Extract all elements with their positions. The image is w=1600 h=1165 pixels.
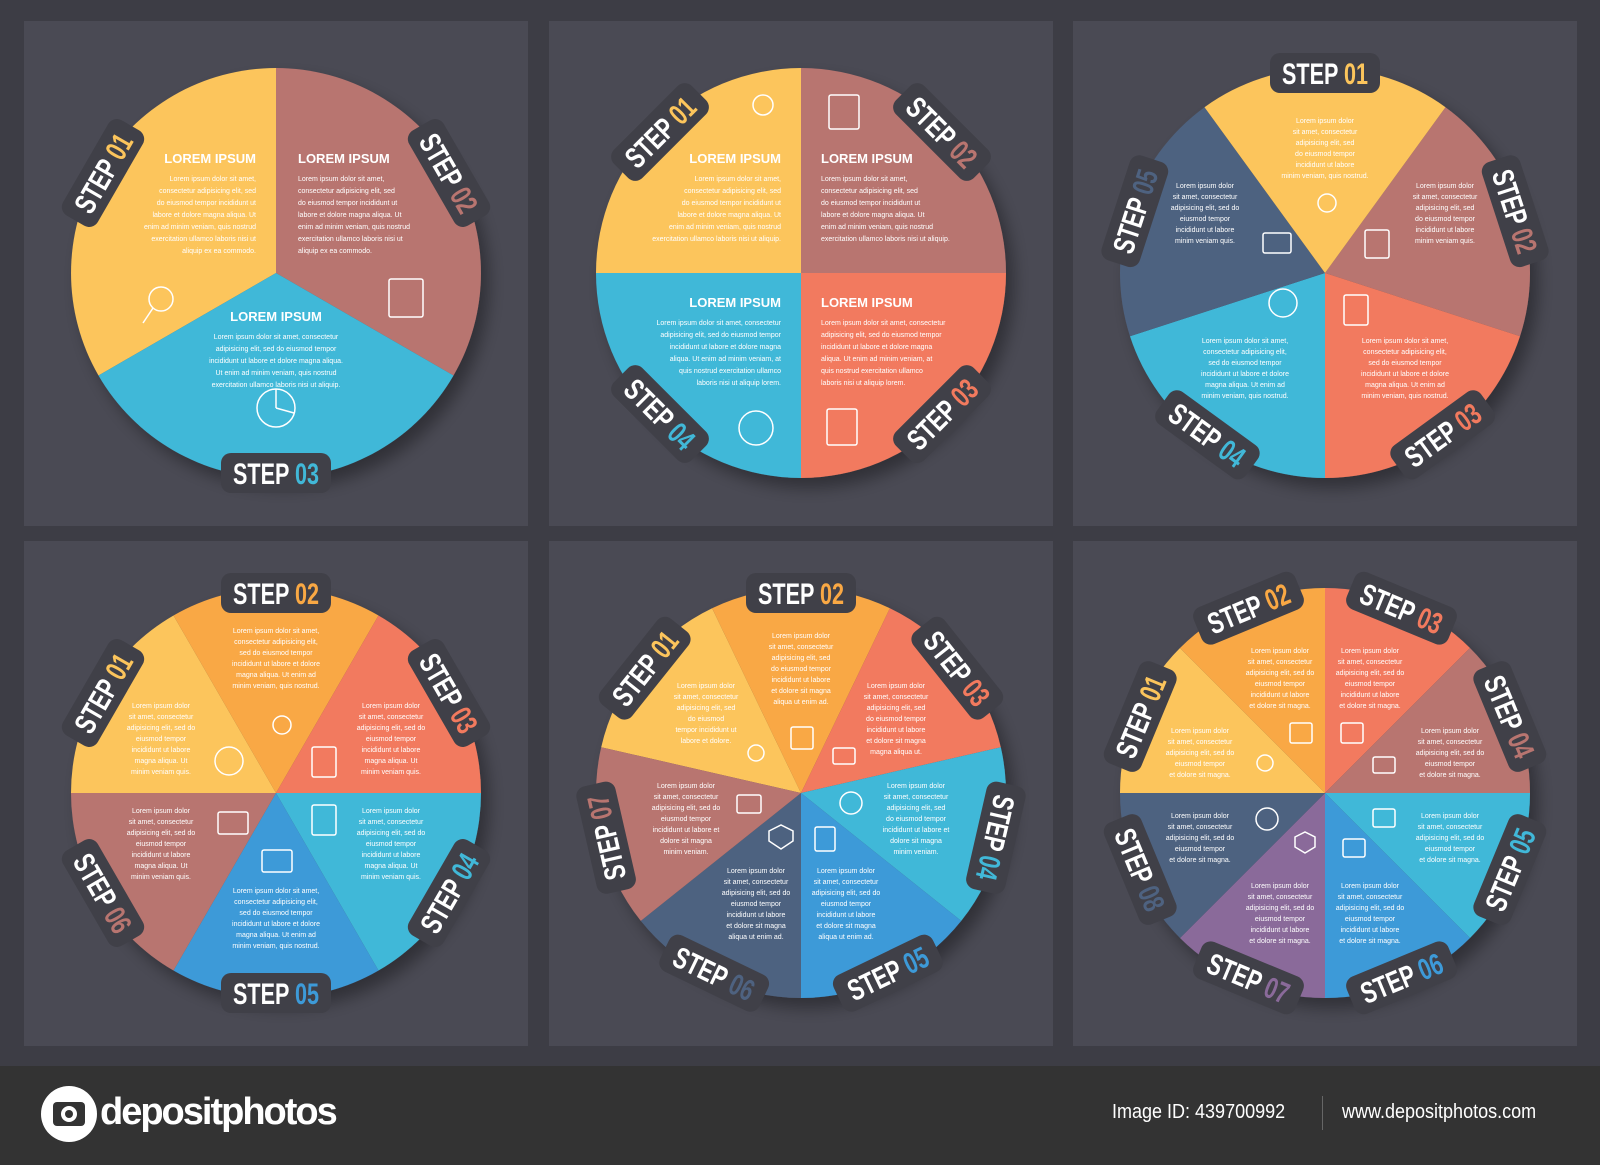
texts: sit amet, consectetur [1338, 659, 1403, 666]
step labels: STEP 04 [1477, 671, 1540, 763]
texts: incididunt ut labore [1251, 692, 1309, 699]
texts: consectetur adipisicing elit, sed [684, 188, 781, 195]
texts: eiusmod tempor [1345, 916, 1396, 923]
texts: Lorem ipsum dolor sit amet, consectetur [656, 320, 782, 327]
texts: sit amet, consectetur [724, 879, 789, 886]
texts: sit amet, consectetur [359, 714, 424, 721]
step labels: STEP 01 [1110, 671, 1173, 763]
text: wedge 1: consectetur adipisicing elit, sed [159, 188, 256, 195]
texts: minim veniam quis. [1175, 238, 1235, 245]
texts: minim veniam, quis nostrud. [232, 943, 320, 950]
texts: incididunt ut labore et dolore [1361, 371, 1449, 378]
texts: consectetur adipisicing elit, [234, 639, 318, 646]
texts: Lorem ipsum dolor [362, 703, 421, 710]
texts: adipisicing elit, sed do eiusmod tempor [821, 332, 942, 339]
step labels [58, 115, 494, 493]
texts: incididunt ut labore [362, 747, 420, 754]
pie: 6 wedges [71, 588, 481, 998]
pie: 5 wedges [1120, 68, 1530, 478]
step labels: STEP 06 [668, 941, 759, 1008]
texts: Lorem ipsum dolor [1421, 813, 1480, 820]
texts: sit amet, consectetur [674, 694, 739, 701]
texts: Lorem ipsum dolor [657, 783, 716, 790]
texts: consectetur adipisicing elit, [1363, 349, 1447, 356]
texts: incididunt ut labore et dolore [232, 661, 320, 668]
texts: eiusmod tempor [136, 841, 187, 848]
text: wedge 3: Lorem ipsum dolor sit amet, consectetur [214, 334, 339, 341]
step labels: STEP 01 [69, 128, 140, 219]
texts: incididunt ut labore et dolore magna [670, 344, 781, 351]
texts: consectetur adipisicing elit, sed [821, 188, 918, 195]
texts: adipisicing elit, sed do [357, 830, 425, 837]
texts: magna aliqua. Ut enim ad [236, 932, 316, 939]
step labels: STEP 04 [415, 848, 486, 939]
texts: adipisicing elit, sed do [1166, 750, 1234, 757]
texts: Lorem ipsum dolor sit amet, consectetur [821, 320, 946, 327]
step labels [574, 573, 1028, 1015]
texts: eiusmod tempor [1175, 846, 1226, 853]
texts: consectetur adipisicing elit, [234, 899, 318, 906]
texts: sit amet, consectetur [1173, 194, 1238, 201]
texts: labore et dolore magna aliqua. Ut [677, 212, 781, 219]
step labels [607, 79, 995, 467]
texts: sit amet, consectetur [129, 819, 194, 826]
texts: eiusmod tempor [366, 736, 417, 743]
step labels: STEP 03 [233, 458, 319, 491]
texts: Lorem ipsum dolor [1171, 813, 1230, 820]
texts: minim veniam, quis nostrud. [1361, 393, 1449, 400]
texts: Lorem ipsum dolor [1296, 118, 1355, 125]
texts: minim veniam quis. [131, 769, 191, 776]
texts: quis nostrud exercitation ullamco [821, 368, 923, 375]
step labels: STEP 08 [1107, 824, 1171, 916]
texts: do eiusmod tempor [1415, 216, 1476, 223]
texts: magna aliqua. Ut enim ad [1205, 382, 1285, 389]
texts: et dolore sit magna. [1249, 703, 1311, 710]
step labels: STEP 06 [1356, 947, 1448, 1011]
texts: sit amet, consectetur [1418, 739, 1483, 746]
text: wedge 2: do eiusmod tempor incididunt ut [298, 200, 397, 207]
texts: incididunt ut labore et dolore [1201, 371, 1289, 378]
step labels: STEP 02 [233, 578, 319, 611]
texts: Lorem ipsum dolor sit amet, [695, 176, 781, 183]
texts: Lorem ipsum dolor [1341, 883, 1400, 890]
step labels: STEP 02 [1485, 166, 1543, 258]
texts: eiusmod tempor [821, 901, 872, 908]
texts: minim veniam, quis nostrud. [232, 683, 320, 690]
texts: et dolore sit magna. [1169, 857, 1231, 864]
step labels: STEP 02 [412, 128, 483, 219]
step labels: STEP 04 [969, 792, 1020, 883]
texts: et dolore sit magna [726, 923, 786, 930]
texts: enim ad minim veniam, quis nostrud [821, 224, 933, 231]
texts: sit amet, consectetur [1338, 894, 1403, 901]
text: wedge 3: LOREM IPSUM [230, 309, 322, 324]
pie: 4 wedges [596, 68, 1006, 478]
texts: magna aliqua. Ut [365, 758, 418, 765]
text: wedge 2: LOREM IPSUM [298, 151, 390, 166]
texts: Lorem ipsum dolor [817, 868, 876, 875]
texts [1171, 118, 1478, 400]
texts: eiusmod tempor [366, 841, 417, 848]
step labels: STEP 07 [582, 792, 633, 883]
step labels: STEP 02 [899, 91, 983, 175]
texts: do eiusmod tempor [771, 666, 832, 673]
texts: magna aliqua. Ut enim ad [236, 672, 316, 679]
texts: do eiusmod tempor incididunt ut [821, 200, 920, 207]
text: wedge 2: Lorem ipsum dolor sit amet, [298, 176, 384, 183]
icon: camera logo [41, 1086, 97, 1142]
icons [1256, 723, 1395, 857]
step labels: STEP 07 [1202, 947, 1294, 1011]
texts: eiusmod tempor [731, 901, 782, 908]
icons [737, 727, 862, 851]
texts: adipisicing elit, sed do [1246, 670, 1314, 677]
texts: Lorem ipsum dolor [772, 633, 831, 640]
texts: magna aliqua. Ut [365, 863, 418, 870]
texts: quis nostrud exercitation ullamco [679, 368, 781, 375]
texts: incididunt ut labore [1251, 927, 1309, 934]
texts: et dolore sit magna [816, 923, 876, 930]
texts: Lorem ipsum dolor sit amet, [233, 628, 319, 635]
texts: dolore sit magna [890, 838, 942, 845]
texts: sit amet, consectetur [769, 644, 834, 651]
texts: sit amet, consectetur [884, 794, 949, 801]
texts: Lorem ipsum dolor [867, 683, 926, 690]
texts: tempor incididunt ut [675, 727, 737, 734]
texts: adipisicing elit, sed [1416, 205, 1474, 212]
texts: incididunt ut labore [1341, 692, 1399, 699]
panel: 8 steps [1073, 541, 1577, 1046]
texts: incididunt ut labore et dolore magna [821, 344, 932, 351]
texts: incididunt ut labore [132, 747, 190, 754]
panel: 4 steps [549, 21, 1053, 526]
step labels: STEP 03 [1355, 578, 1447, 641]
texts: eiusmod tempor [1255, 681, 1306, 688]
texts: sit amet, consectetur [1248, 659, 1313, 666]
pie: 8 wedges [1120, 588, 1530, 998]
pie: 7 wedges [596, 588, 1006, 998]
texts: dolore sit magna [660, 838, 712, 845]
texts: Lorem ipsum dolor [887, 783, 946, 790]
texts: laboris nisi ut aliquip lorem. [821, 380, 905, 387]
texts: adipisicing elit, sed [677, 705, 735, 712]
text: wedge 2: enim ad minim veniam, quis nostrud [298, 224, 410, 231]
panel: 5 steps [1073, 21, 1577, 526]
texts [652, 151, 950, 387]
step labels: STEP 05 [1107, 166, 1165, 258]
texts: minim veniam quis. [361, 874, 421, 881]
texts: incididunt ut labore [1341, 927, 1399, 934]
text: wedge 3: incididunt ut labore et dolore magna aliqua. [209, 358, 343, 365]
step labels: STEP 01 [619, 91, 703, 175]
texts: Lorem ipsum dolor [1416, 183, 1475, 190]
pie: 3 wedges [71, 68, 481, 478]
texts: et dolore sit magna [771, 688, 831, 695]
texts: adipisicing elit, sed do [127, 725, 195, 732]
text: wedge 1 [144, 151, 256, 255]
texts: aliqua. Ut enim ad minim veniam, at [821, 356, 932, 363]
texts: eiusmod tempor [1345, 681, 1396, 688]
texts: Lorem ipsum dolor [132, 703, 191, 710]
step labels [1101, 569, 1549, 1017]
texts: do eiusmod tempor [1295, 151, 1356, 158]
panel: 7 steps [549, 541, 1053, 1046]
texts: LOREM IPSUM [689, 295, 781, 310]
text: wedge 2 [298, 151, 410, 255]
texts: sit amet, consectetur [654, 794, 719, 801]
texts: et dolore sit magna. [1419, 772, 1481, 779]
texts: magna aliqua. Ut [135, 758, 188, 765]
step labels: STEP 02 [758, 578, 844, 611]
texts: adipisicing elit, sed do [652, 805, 720, 812]
texts: aliqua. Ut enim ad minim veniam, at [670, 356, 781, 363]
step labels: STEP 04 [617, 373, 701, 457]
texts: sed do eiusmod tempor [1368, 360, 1442, 367]
step labels: STEP 03 [901, 373, 985, 457]
step labels: STEP 01 [1282, 58, 1368, 91]
logo [41, 1086, 336, 1142]
texts: consectetur adipisicing elit, [1203, 349, 1287, 356]
texts: labore et dolore magna aliqua. Ut [821, 212, 925, 219]
texts: eiusmod tempor [1425, 846, 1476, 853]
texts: sit amet, consectetur [864, 694, 929, 701]
step labels: STEP 05 [843, 941, 934, 1008]
text: wedge 2: exercitation ullamco laboris nisi ut [298, 236, 403, 243]
icons [143, 279, 423, 427]
texts: aliqua ut enim ad. [728, 934, 784, 941]
texts: sit amet, consectetur [1168, 739, 1233, 746]
texts: sit amet, consectetur [1168, 824, 1233, 831]
step labels: STEP 03 [1399, 397, 1488, 475]
texts: LOREM IPSUM [821, 295, 913, 310]
texts: incididunt ut labore [727, 912, 785, 919]
texts: incididunt ut labore [362, 852, 420, 859]
step labels [58, 573, 494, 1013]
texts: incididunt ut labore et [653, 827, 719, 834]
texts: do eiusmod [688, 716, 724, 723]
texts: Lorem ipsum dolor [1171, 728, 1230, 735]
texts: do eiusmod tempor [866, 716, 927, 723]
icons [739, 95, 859, 445]
texts: labore et dolore. [681, 738, 731, 745]
texts: et dolore sit magna. [1419, 857, 1481, 864]
texts: aliqua ut enim ad. [773, 699, 829, 706]
texts [652, 633, 949, 941]
panel: 3 steps [24, 21, 528, 526]
logo: depositphotos [100, 1091, 336, 1133]
texts: et dolore sit magna. [1249, 938, 1311, 945]
step labels: STEP 01 [69, 648, 140, 739]
text: wedge 1: LOREM IPSUM [164, 151, 256, 166]
texts: adipisicing elit, sed do [1416, 750, 1484, 757]
step labels: STEP 03 [916, 625, 996, 713]
texts: Lorem ipsum dolor [132, 808, 191, 815]
texts: exercitation ullamco laboris nisi ut aliquip. [652, 236, 781, 243]
texts: adipisicing elit, sed [887, 805, 945, 812]
texts: Lorem ipsum dolor [1341, 648, 1400, 655]
texts: aliqua ut enim ad. [818, 934, 874, 941]
text: wedge 3 [209, 309, 343, 389]
texts: sed do eiusmod tempor [1208, 360, 1282, 367]
texts: eiusmod tempor [136, 736, 187, 743]
texts: incididunt ut labore [772, 677, 830, 684]
texts: laboris nisi ut aliquip lorem. [697, 380, 781, 387]
step labels: STEP 05 [233, 978, 319, 1011]
texts: LOREM IPSUM [689, 151, 781, 166]
website text: www.depositphotos.com [1342, 1101, 1536, 1123]
texts: sit amet, consectetur [1418, 824, 1483, 831]
text: wedge 1: labore et dolore magna aliqua. Ut [152, 212, 256, 219]
text: wedge 1: enim ad minim veniam, quis nostrud [144, 224, 256, 231]
texts: et dolore sit magna [866, 738, 926, 745]
texts: magna aliqua. Ut [135, 863, 188, 870]
text: wedge 1: Lorem ipsum dolor sit amet, [170, 176, 256, 183]
texts: incididunt ut labore [1296, 162, 1354, 169]
step labels: STEP 05 [1479, 824, 1543, 916]
texts: Lorem ipsum dolor [1421, 728, 1480, 735]
texts: minim veniam quis. [131, 874, 191, 881]
texts: Lorem ipsum dolor [1251, 883, 1310, 890]
texts: adipisicing elit, sed do [127, 830, 195, 837]
texts: et dolore sit magna. [1339, 938, 1401, 945]
image id text: Image ID: 439700992 [1112, 1101, 1285, 1123]
texts: adipisicing elit, sed do [722, 890, 790, 897]
texts: adipisicing elit, sed [1296, 140, 1354, 147]
text: wedge 2: labore et dolore magna aliqua. Ut [298, 212, 402, 219]
texts: sit amet, consectetur [1413, 194, 1478, 201]
texts: minim veniam quis. [361, 769, 421, 776]
texts: eiusmod tempor [1255, 916, 1306, 923]
text: wedge 1: exercitation ullamco laboris nisi ut [151, 236, 256, 243]
texts: eiusmod tempor [661, 816, 712, 823]
texts: sit amet, consectetur [814, 879, 879, 886]
texts: adipisicing elit, sed do [1171, 205, 1239, 212]
texts: eiusmod tempor [1425, 761, 1476, 768]
texts: Lorem ipsum dolor sit amet, [233, 888, 319, 895]
texts [1166, 648, 1484, 945]
texts: adipisicing elit, sed do [812, 890, 880, 897]
panel: 6 steps [24, 541, 528, 1046]
texts: adipisicing elit, sed do [1336, 670, 1404, 677]
text: wedge 1: aliquip ex ea commodo. [182, 248, 256, 255]
texts: minim veniam. [893, 849, 939, 856]
texts: sit amet, consectetur [359, 819, 424, 826]
texts: minim veniam quis. [1415, 238, 1475, 245]
text: wedge 2: aliquip ex ea commodo. [298, 248, 372, 255]
texts [127, 628, 425, 950]
texts: sed do eiusmod tempor [239, 910, 313, 917]
texts: Lorem ipsum dolor sit amet, [1202, 338, 1288, 345]
step labels: STEP 02 [1203, 578, 1295, 641]
texts: Lorem ipsum dolor [1251, 648, 1310, 655]
texts: adipisicing elit, sed do [1416, 835, 1484, 842]
texts: et dolore sit magna. [1169, 772, 1231, 779]
texts: incididunt ut labore et [883, 827, 949, 834]
texts: magna aliqua. Ut enim ad [1365, 382, 1445, 389]
texts: sit amet, consectetur [1248, 894, 1313, 901]
texts: Lorem ipsum dolor sit amet, [821, 176, 907, 183]
step labels: STEP 06 [66, 848, 137, 939]
text: wedge 2: consectetur adipisicing elit, sed [298, 188, 395, 195]
texts: Lorem ipsum dolor [1176, 183, 1235, 190]
texts: Lorem ipsum dolor [362, 808, 421, 815]
texts: incididunt ut labore [1416, 227, 1474, 234]
texts: minim veniam, quis nostrud. [1281, 173, 1369, 180]
texts: adipisicing elit, sed do [1166, 835, 1234, 842]
texts: do eiusmod tempor [886, 816, 947, 823]
step labels: STEP 04 [1162, 397, 1251, 475]
texts: Lorem ipsum dolor sit amet, [1362, 338, 1448, 345]
texts: adipisicing elit, sed [867, 705, 925, 712]
text: wedge 1: do eiusmod tempor incididunt ut [157, 200, 256, 207]
texts: et dolore sit magna. [1339, 703, 1401, 710]
texts: Lorem ipsum dolor [727, 868, 786, 875]
texts: adipisicing elit, sed [772, 655, 830, 662]
step labels: STEP 03 [412, 648, 483, 739]
step labels: STEP 01 [606, 625, 686, 713]
texts: exercitation ullamco laboris nisi ut aliquip. [821, 236, 950, 243]
texts: adipisicing elit, sed do eiusmod tempor [660, 332, 782, 339]
texts: eiusmod tempor [1180, 216, 1231, 223]
texts: incididunt ut labore [817, 912, 875, 919]
texts: sed do eiusmod tempor [239, 650, 313, 657]
texts: incididunt ut labore [867, 727, 925, 734]
texts: enim ad minim veniam, quis nostrud [669, 224, 781, 231]
texts: sit amet, consectetur [1293, 129, 1358, 136]
texts: adipisicing elit, sed do [357, 725, 425, 732]
texts: incididunt ut labore et dolore [232, 921, 320, 928]
texts: incididunt ut labore [132, 852, 190, 859]
texts: LOREM IPSUM [821, 151, 913, 166]
texts: minim veniam. [663, 849, 709, 856]
texts: Lorem ipsum dolor [677, 683, 736, 690]
text: wedge 3: Ut enim ad minim veniam, quis nostrud [216, 370, 337, 377]
texts: eiusmod tempor [1175, 761, 1226, 768]
text: wedge 3: adipisicing elit, sed do eiusmod tempor [216, 346, 337, 353]
step labels [1099, 53, 1551, 483]
texts: adipisicing elit, sed do [1246, 905, 1314, 912]
texts: do eiusmod tempor incididunt ut [682, 200, 781, 207]
text: wedge 3: exercitation ullamco laboris nisi ut aliquip. [212, 382, 340, 389]
texts: sit amet, consectetur [129, 714, 194, 721]
texts: adipisicing elit, sed do [1336, 905, 1404, 912]
texts: minim veniam, quis nostrud. [1201, 393, 1289, 400]
icons [215, 716, 336, 872]
texts: incididunt ut labore [1176, 227, 1234, 234]
footer bar [0, 1066, 1600, 1165]
icons [1263, 194, 1389, 325]
texts: magna aliqua ut. [870, 749, 922, 756]
